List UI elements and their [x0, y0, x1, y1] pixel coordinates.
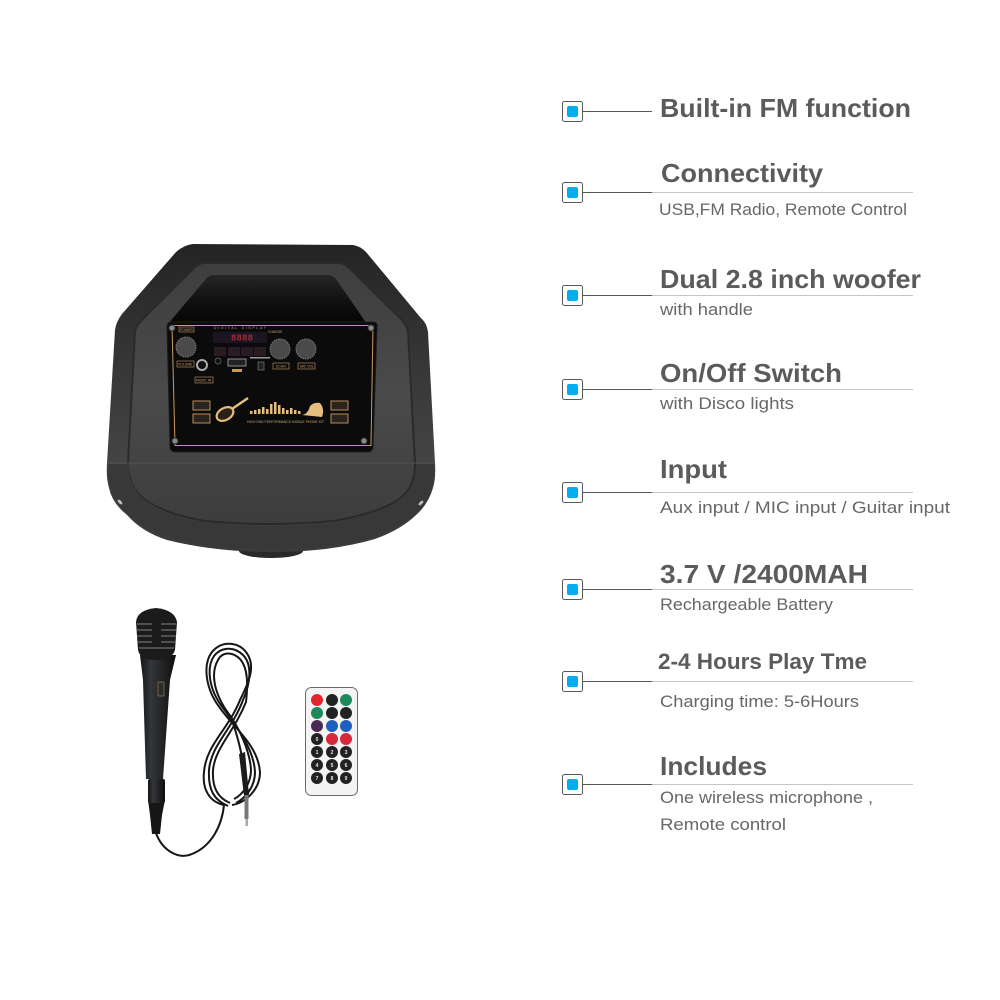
- heading: 2-4 Hours Play Tme: [658, 649, 867, 674]
- gold badge: [302, 403, 323, 417]
- bullet icon: [562, 580, 582, 600]
- leader line: [583, 784, 913, 786]
- feature: Connectivity: [562, 158, 913, 219]
- description: One wireless microphone ,: [660, 788, 873, 807]
- remote buttons: [311, 694, 352, 784]
- mic handle: [140, 655, 176, 779]
- microphone: [136, 608, 260, 856]
- leader line: [583, 680, 913, 682]
- remote control: [306, 688, 358, 796]
- bullet icon: [562, 182, 582, 202]
- remote button numbers: 3: [345, 750, 348, 756]
- description: Rechargeable Battery: [660, 595, 834, 614]
- description: Remote control: [660, 815, 786, 834]
- speaker seam: [107, 462, 435, 464]
- leader line: [583, 492, 913, 494]
- speaker highlights: [117, 499, 424, 506]
- heading: Input: [660, 454, 727, 484]
- leader line: [583, 588, 913, 590]
- feature: Built-in FM function: [562, 93, 911, 123]
- feature: Battery: [562, 559, 913, 614]
- remote button numbers: 2: [331, 750, 334, 756]
- heading: Built-in FM function: [660, 93, 911, 123]
- remote button numbers: 5: [331, 763, 334, 769]
- knobs: [176, 337, 316, 359]
- control labels: CHARGE: [268, 330, 283, 334]
- bullet icon: [562, 482, 582, 502]
- description: with handle: [659, 300, 753, 319]
- guitar logo: [214, 398, 248, 424]
- digital display: DIGITAL DISPLAY: [214, 326, 267, 330]
- remote button numbers: 9: [345, 776, 348, 782]
- control panel: [167, 322, 377, 452]
- bullet icon: [562, 774, 582, 794]
- leader line: [583, 110, 652, 112]
- heading: Dual 2.8 inch woofer: [660, 264, 921, 294]
- mic switch: [158, 682, 164, 696]
- heading: On/Off Switch: [660, 358, 842, 388]
- speaker body: [107, 244, 435, 552]
- mic collar: [148, 779, 165, 803]
- remote button numbers: 4: [316, 763, 319, 769]
- remote button numbers: 1: [316, 750, 319, 756]
- equalizer bars: [250, 402, 300, 414]
- description: with Disco lights: [659, 394, 794, 413]
- mic plug: [239, 752, 249, 826]
- bullet icon: [562, 286, 582, 306]
- mode buttons: [214, 347, 266, 356]
- remote button numbers: [316, 737, 348, 782]
- panel plate: [167, 322, 377, 452]
- digital display: [213, 326, 267, 344]
- mic head: [136, 608, 177, 660]
- speaker: [107, 244, 435, 558]
- speaker inner bezel: [128, 263, 415, 524]
- remote button numbers: 0: [316, 737, 319, 743]
- control labels: [177, 327, 315, 383]
- tagline: HIGH END PERFORMANCE MOBILE PHONE KIT: [247, 420, 324, 424]
- control labels: ECHO: [276, 364, 286, 368]
- bullet icon: [562, 380, 582, 400]
- gold border: [172, 326, 373, 446]
- heading: 3.7 V /2400MAH: [660, 559, 868, 589]
- bullet icon: [562, 672, 582, 692]
- mic tail: [148, 800, 165, 834]
- mic cable: [156, 644, 260, 856]
- description: USB,FM Radio, Remote Control: [659, 200, 907, 219]
- mic grille: [137, 624, 176, 648]
- remote body: [306, 688, 358, 796]
- feature: Dual 2.8 inch woofer: [562, 264, 921, 319]
- feature: Play time: [562, 649, 913, 711]
- control labels: POWER: [180, 328, 193, 332]
- speaker top recess: [168, 275, 367, 324]
- remote button numbers: 7: [316, 776, 319, 782]
- description: Aux input / MIC input / Guitar input: [660, 498, 950, 517]
- feature boxes: [193, 401, 348, 423]
- leader line: [583, 388, 913, 390]
- remote button numbers: 8: [331, 776, 334, 782]
- feature: On/Off Switch: [562, 358, 913, 413]
- feature: Includes: [562, 751, 913, 834]
- description: Charging time: 5-6Hours: [660, 692, 859, 711]
- heading: Includes: [660, 751, 767, 781]
- feature: Input: [562, 454, 950, 517]
- remote button numbers: 6: [345, 763, 348, 769]
- control labels: MUSIC IN: [196, 378, 212, 382]
- description: [660, 788, 873, 834]
- leader line: [583, 294, 913, 296]
- speaker lower band: [108, 464, 434, 549]
- heading: Connectivity: [661, 158, 824, 188]
- digital display: 8888: [231, 334, 253, 344]
- control labels: MIC VOL: [300, 364, 314, 368]
- panel screws: [169, 325, 374, 444]
- speaker base foot: [239, 544, 303, 558]
- control labels: VOLUME: [178, 362, 193, 366]
- bullet icon: [562, 102, 582, 122]
- leader line: [583, 192, 913, 194]
- input jacks: [197, 357, 270, 372]
